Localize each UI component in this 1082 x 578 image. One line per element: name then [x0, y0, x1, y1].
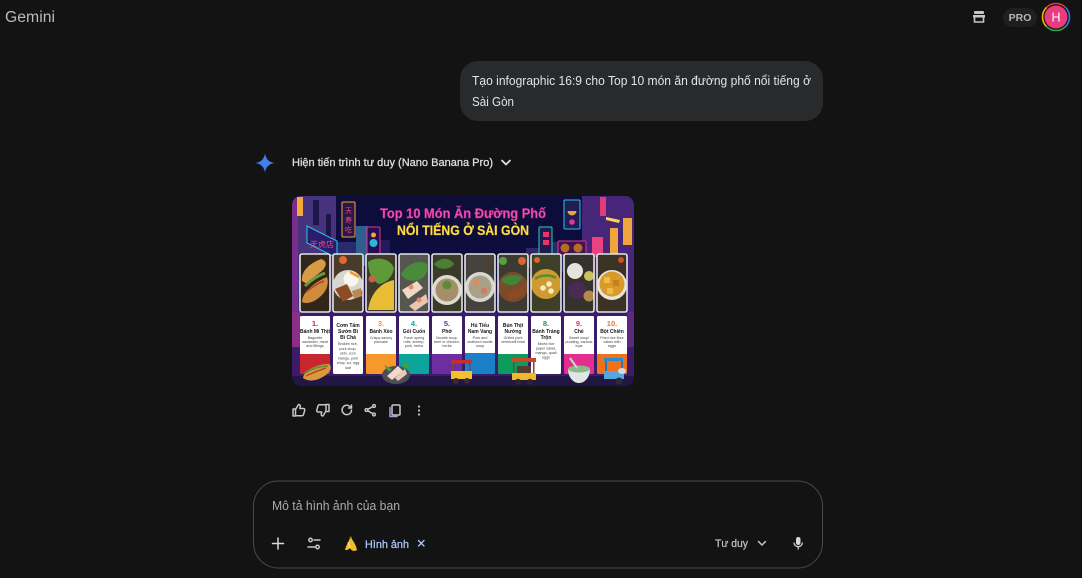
- title: [380, 206, 546, 238]
- label card: Bột Chiên: [600, 329, 624, 335]
- card 5: [432, 254, 462, 374]
- wall behind cards: [292, 312, 634, 376]
- icon: banana: [345, 536, 357, 551]
- label card: pork, herbs: [405, 344, 423, 348]
- generated infographic image: [292, 196, 634, 386]
- label card: 1.: [312, 319, 318, 328]
- header controls: [973, 3, 1070, 31]
- card 7: [498, 254, 528, 374]
- icon: temporary chat: [973, 11, 985, 22]
- label card: 8.: [543, 319, 549, 328]
- label card: 3.: [378, 319, 384, 328]
- card 8: [531, 254, 561, 374]
- icon: close: [418, 540, 424, 546]
- photo: che: [564, 254, 594, 312]
- photo: bun thit nuong: [498, 254, 528, 312]
- label card: Crispy savory: [370, 336, 392, 340]
- label card: herbs: [442, 344, 452, 348]
- label card: [465, 316, 495, 374]
- Gemini logo: Gemini: [5, 9, 55, 26]
- icon: more: [418, 405, 420, 416]
- label card: [399, 316, 429, 374]
- prompt input box: [254, 481, 822, 568]
- tool chip label: Hình ảnh: [365, 539, 409, 551]
- thinking toggle: Hiện tiến trình tư duy (Nano Banana Pro): [292, 157, 493, 169]
- street: [292, 376, 634, 386]
- photo: com tam: [333, 254, 363, 312]
- PRO badge: PRO: [1009, 12, 1031, 24]
- card 2: [333, 254, 363, 374]
- label card: Mixed rice: [538, 342, 554, 346]
- label card: Fried rice flour: [600, 336, 625, 340]
- label card: Nam Vang: [468, 329, 492, 335]
- photo: hu tieu: [465, 254, 495, 312]
- label card: Bún Thịt: [503, 323, 523, 329]
- label card: Baguette: [308, 336, 322, 340]
- label card: [432, 316, 462, 374]
- label card: 10.: [607, 319, 617, 328]
- left buildings: [292, 196, 390, 316]
- photo: banh mi: [300, 254, 330, 312]
- user prompt bubble: Sài Gòn: [472, 95, 514, 109]
- title: Top 10 Món Ăn Đường Phố: [380, 206, 546, 221]
- label card: Bánh Xèo: [369, 329, 393, 335]
- title: NỔI TIẾNG Ở SÀI GÒN: [397, 223, 529, 238]
- label card: vermicelli bowl: [501, 340, 525, 344]
- sign: left blue: [307, 226, 337, 258]
- photo: pho: [432, 254, 462, 312]
- sign: left bowl: [367, 227, 380, 254]
- label card: tops: [576, 344, 583, 348]
- card 4: [399, 254, 429, 374]
- label card: Noodle soup,: [436, 336, 458, 340]
- illustration: cart orange: [451, 360, 472, 384]
- sign: right food: [558, 241, 586, 255]
- icon: microphone: [794, 537, 802, 550]
- label card: [498, 316, 528, 374]
- icon: redo: [342, 405, 352, 415]
- label card: Phở: [442, 329, 452, 335]
- label card: [564, 316, 594, 374]
- label card: Sweet soup/: [569, 336, 590, 340]
- label card: [300, 316, 330, 374]
- placeholder: Mô tả hình ảnh của bạn: [272, 499, 400, 513]
- neon signs: [307, 200, 586, 258]
- label card: chop, sư, egg: [337, 361, 359, 365]
- sign: left yellow: 天: [345, 206, 352, 216]
- illustration: cart blue: [604, 358, 626, 384]
- label card: Cơm Tấm: [336, 322, 360, 329]
- sign: left yellow: 寿: [345, 216, 352, 226]
- card 10: [597, 254, 627, 374]
- right buildings: [526, 196, 634, 316]
- label card: skin, corn: [340, 352, 356, 356]
- photo: banh xeo: [366, 254, 396, 312]
- sign: right small: [539, 227, 552, 254]
- label card: mango, pork: [338, 356, 358, 360]
- icon: copy: [390, 405, 400, 416]
- label card: cakes with: [603, 340, 621, 344]
- card 9: [564, 254, 594, 374]
- user prompt bubble: [460, 61, 823, 121]
- label card: eggs: [542, 356, 550, 360]
- label card: loaf: [345, 366, 352, 370]
- sign: right bowl: [564, 200, 580, 229]
- label card: Bánh Mì Thịt: [300, 329, 330, 335]
- label card: [531, 316, 561, 374]
- label card: soup: [476, 344, 484, 348]
- label card: [366, 316, 396, 374]
- sign: left yellow: [342, 202, 355, 237]
- icon: thumbs up: [293, 404, 305, 416]
- icon: tools: [308, 538, 320, 549]
- label card: Sườn Bì: [338, 329, 359, 335]
- icon: share: [365, 405, 375, 416]
- photo: bot chien: [597, 254, 627, 312]
- photo: goi cuon: [399, 254, 429, 312]
- label card: seafood noodle: [467, 340, 493, 344]
- label card: pudding, various: [565, 340, 593, 344]
- icon: chevron: [758, 542, 766, 545]
- illustration: spring rolls: [382, 362, 410, 384]
- photo: banh trang tron: [531, 254, 561, 312]
- label card: eggs: [608, 344, 616, 348]
- response action icons: [293, 404, 420, 416]
- label card: 4.: [411, 319, 417, 328]
- icon: Gemini spark: [256, 154, 274, 172]
- illustration: banh mi: [303, 364, 331, 381]
- night sky: [336, 196, 582, 312]
- label card: Bì Chả: [340, 335, 356, 341]
- label card: pork chop,: [339, 347, 357, 351]
- model selector: Tư duy: [715, 538, 748, 550]
- label card: beef or chicken,: [434, 340, 460, 344]
- label card: Chè: [574, 329, 584, 335]
- label card: [333, 316, 363, 374]
- illustration: cart yellow: [512, 358, 536, 385]
- card 1: [300, 254, 330, 374]
- label card: Gỏi Cuốn: [403, 328, 425, 335]
- label card: mango, quail: [535, 351, 557, 355]
- card 6: [465, 254, 495, 374]
- sign: left blue: 天虎店: [310, 239, 334, 250]
- label card: Nướng: [505, 329, 521, 335]
- label card: Trộn: [541, 335, 551, 341]
- user prompt bubble: Tạo infographic 16:9 cho Top 10 món ăn đường phố nổi tiếng ở: [472, 74, 811, 88]
- sign: left yellow: 吃: [345, 225, 352, 235]
- label card: Fresh spring: [404, 336, 424, 340]
- label card: Grilled pork: [504, 336, 523, 340]
- label card: rolls, shrimp,: [404, 340, 424, 344]
- label card: Broken rice,: [338, 342, 358, 346]
- icon: thumbs down: [317, 404, 329, 416]
- label card: paper salad,: [536, 346, 556, 350]
- icon: plus: [272, 538, 284, 549]
- label card: Pork and: [473, 336, 487, 340]
- label card: Hủ Tiếu: [471, 322, 489, 329]
- illustration: che bowl: [568, 358, 590, 383]
- label card: pancake: [374, 340, 388, 344]
- card 3: [366, 254, 396, 374]
- label card: and fillings: [306, 344, 324, 348]
- label card: 9.: [576, 319, 582, 328]
- avatar: H: [1051, 10, 1061, 24]
- label card: Bánh Tráng: [532, 329, 560, 335]
- label card: sandwich, meat: [302, 340, 328, 344]
- label card: [597, 316, 627, 374]
- label card: 5.: [444, 319, 450, 328]
